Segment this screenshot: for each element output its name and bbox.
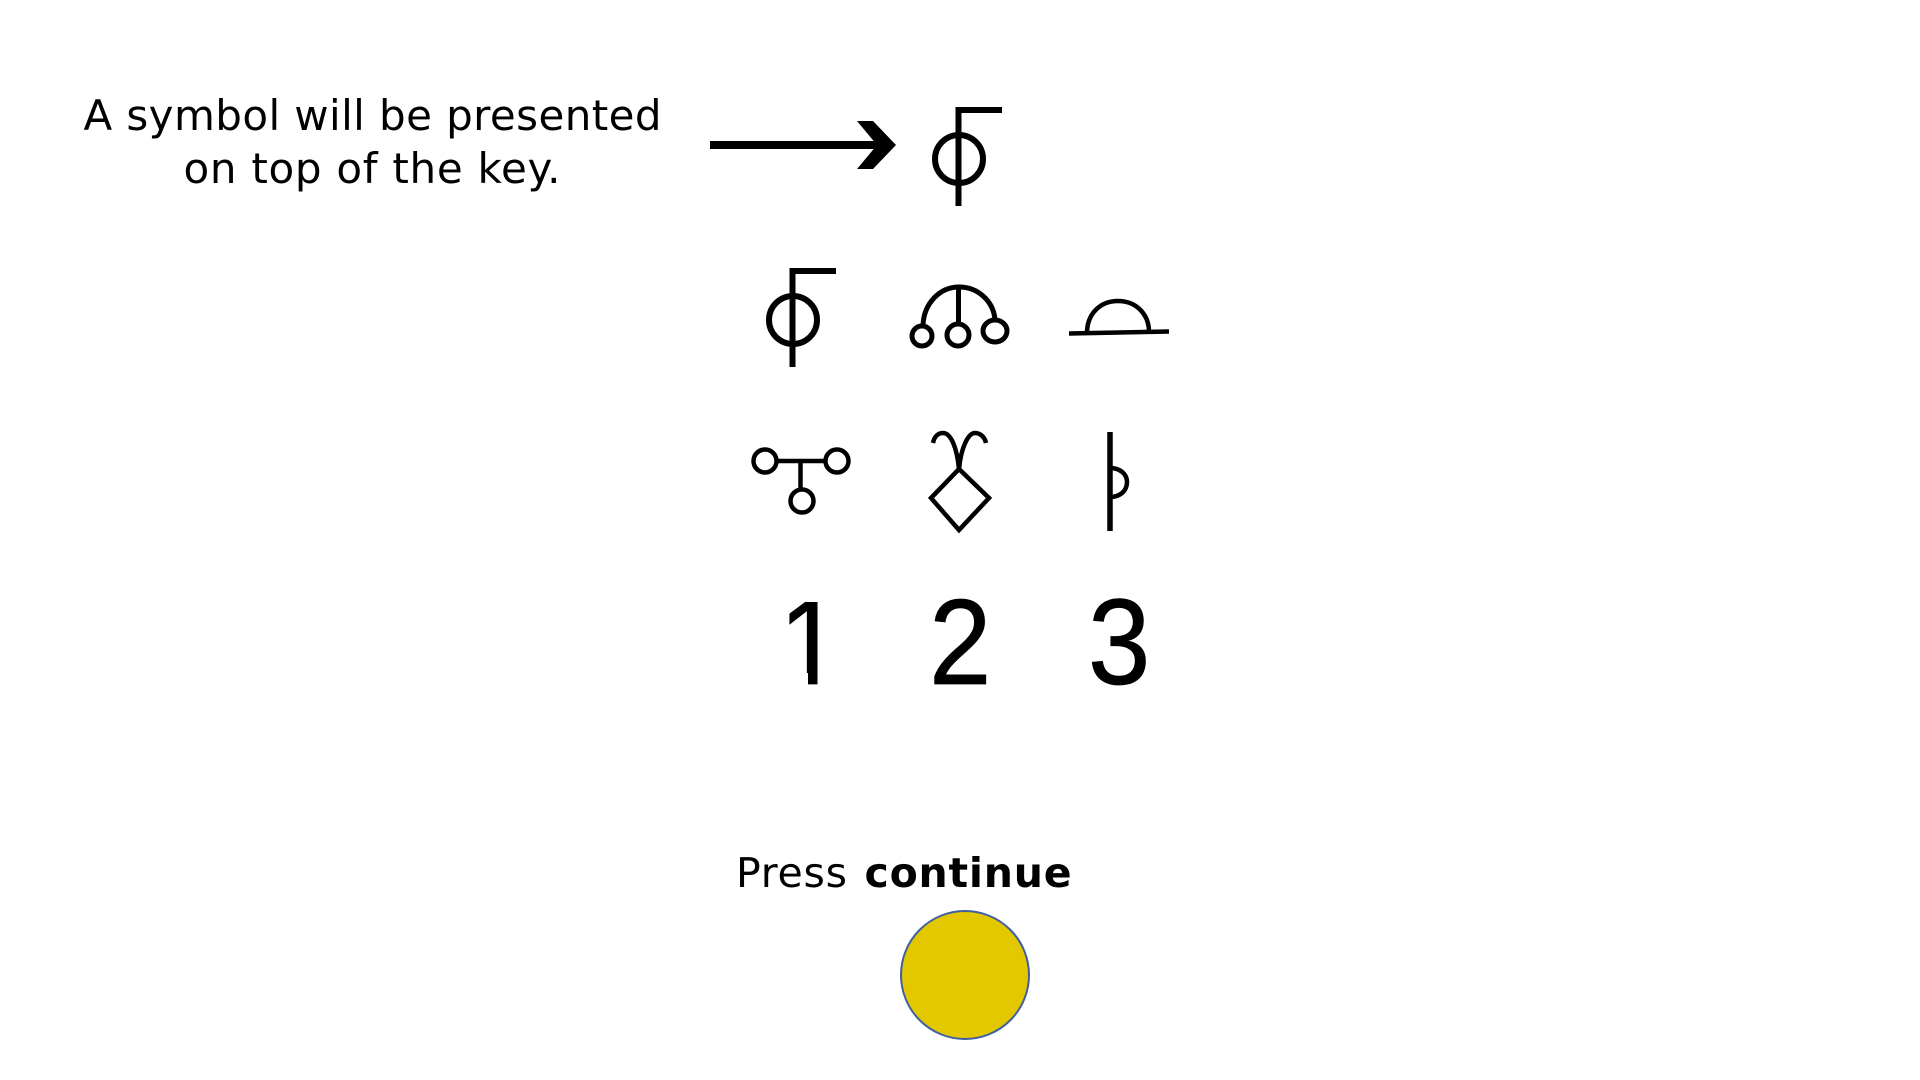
key symbol 2 bottom row — [931, 433, 989, 530]
key symbol 3 bottom row — [1110, 432, 1127, 531]
press continue text: Press — [736, 849, 847, 897]
instruction text: on top of the key. — [184, 144, 560, 193]
press continue text — [736, 849, 1072, 897]
key number 3: 3 — [1088, 574, 1150, 710]
press continue text: continue — [864, 849, 1072, 897]
key number 2: 2 — [929, 574, 991, 710]
key number 1: 1 — [779, 574, 841, 710]
key symbol 2 top row — [912, 287, 1007, 346]
key symbol 1 bottom row — [754, 450, 848, 512]
key symbol 1 top row — [769, 268, 836, 367]
instruction text — [84, 91, 662, 193]
instruction text: A symbol will be presented — [84, 91, 662, 140]
continue button — [901, 911, 1029, 1039]
presented symbol — [935, 107, 1002, 206]
key symbol 3 top row — [1069, 301, 1169, 334]
arrow pointing to symbol — [710, 121, 896, 169]
